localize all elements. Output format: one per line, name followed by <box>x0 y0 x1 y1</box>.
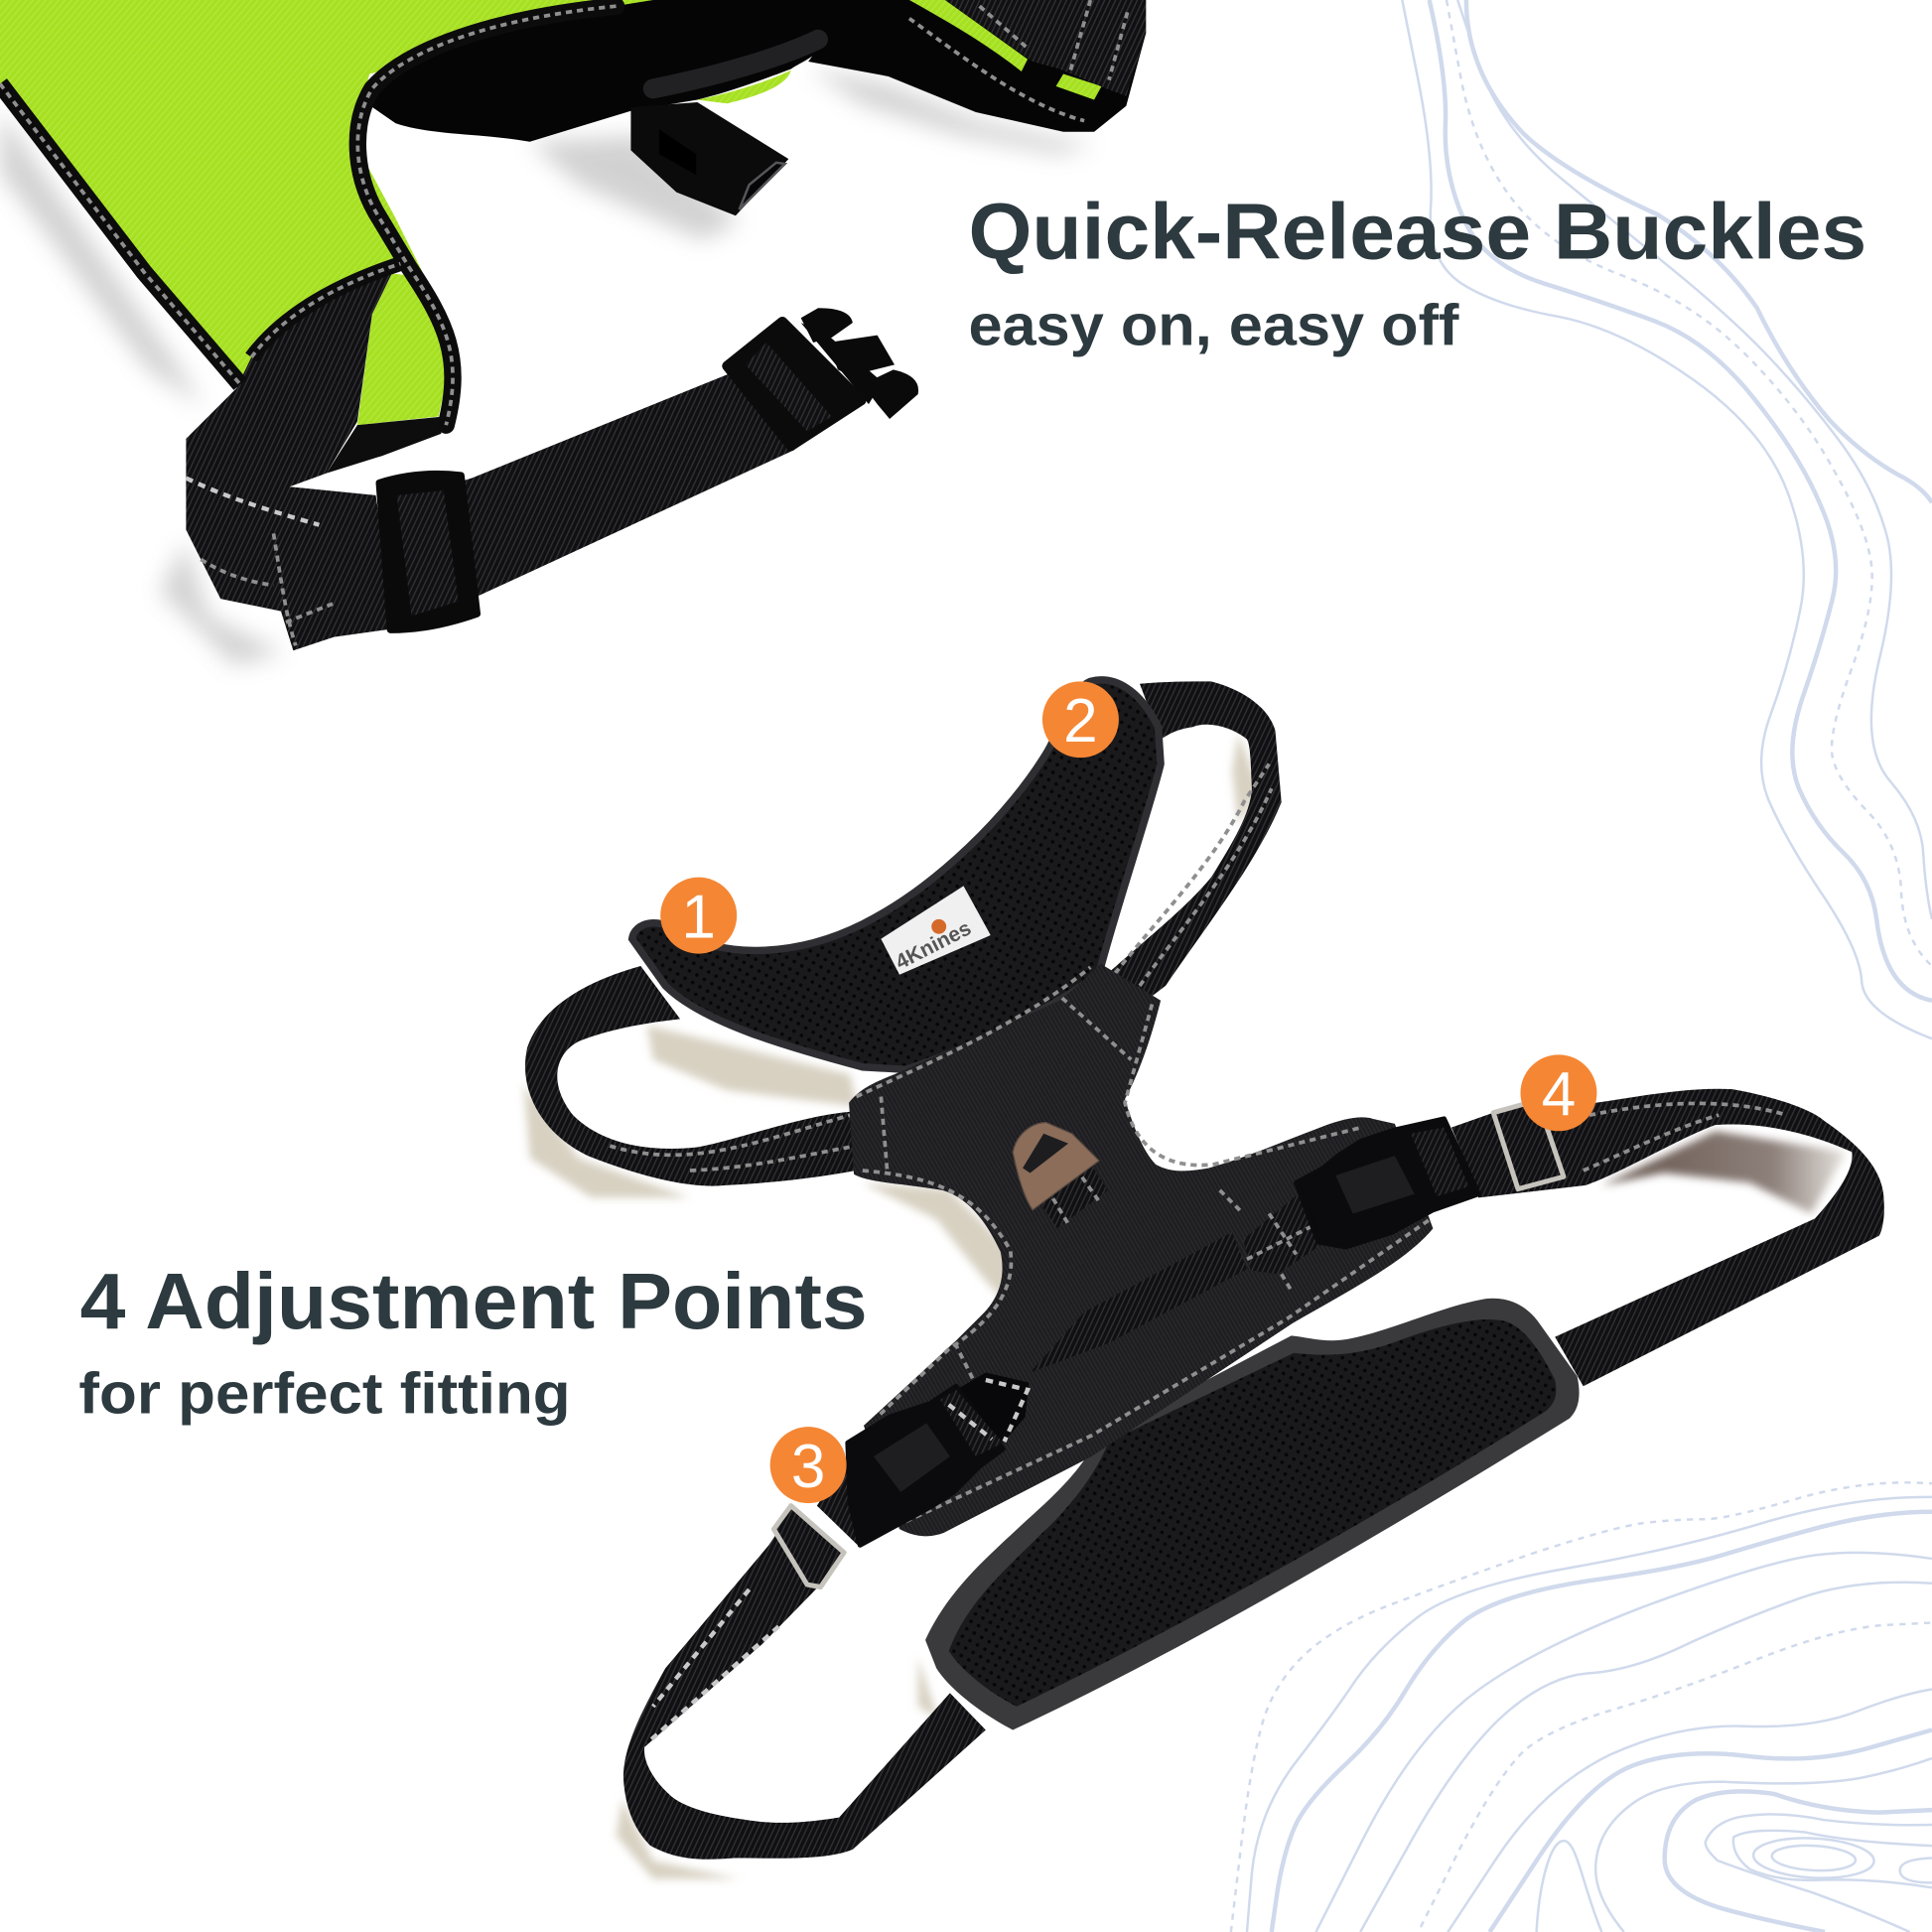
green top right patch <box>1056 73 1102 100</box>
marker 3 <box>770 1427 847 1503</box>
strap between buckle 3 and ring <box>817 1458 884 1545</box>
wing rib highlight <box>653 40 818 88</box>
trim with reflective stitching: right edge <box>357 6 617 425</box>
cast shadows <box>523 733 1846 1879</box>
label brand text: 4Knines <box>893 916 975 974</box>
slide buckle <box>379 475 477 629</box>
marker 2: 2 <box>1063 687 1098 756</box>
marker 1: 1 <box>681 883 716 951</box>
heading: 4 Adjustment Points: 4 Adjustment Points <box>80 1257 868 1345</box>
folded webbing strap <box>186 274 395 650</box>
female buckle end <box>630 102 788 215</box>
photo: black harness <box>523 680 1884 1879</box>
body stitching <box>857 967 1430 1522</box>
central body <box>849 964 1433 1536</box>
green sliver behind lining <box>697 70 791 103</box>
stitches on lower strap <box>186 479 333 645</box>
buckle 4 <box>1297 1119 1478 1247</box>
male buckle prongs <box>801 308 918 419</box>
buckle 3 <box>848 1386 1003 1545</box>
metal slide ring 3 <box>773 1506 844 1587</box>
D-ring with loop <box>1013 1123 1108 1228</box>
trim: lower panel edge <box>251 264 400 357</box>
marker 4: 4 <box>1542 1060 1576 1129</box>
strap: right side loop <box>1453 1089 1884 1386</box>
bottom fold of panel <box>327 416 444 474</box>
marker 2 <box>1042 681 1119 758</box>
decorative contour lines: bottom right <box>1231 1482 1932 1932</box>
heading: Quick-Release Buckles: Quick-Release Buckles <box>968 188 1866 276</box>
male buckle body <box>727 322 862 446</box>
subheading: for perfect fitting: for perfect fitting <box>78 1362 571 1427</box>
big mesh chest pad inner <box>949 1319 1556 1707</box>
strap: top right loop <box>1092 681 1282 1014</box>
small strap by buckle 4 <box>1243 1186 1334 1274</box>
strap reflective stitching <box>610 763 1787 1743</box>
trim: left edge <box>0 83 240 384</box>
neck pad <box>632 680 1161 1069</box>
decorative contour lines: top right <box>1402 0 1932 1038</box>
strap between buckle 4 and ring <box>1451 1113 1518 1192</box>
main strap band <box>425 369 794 617</box>
photo: lime green harness with buckle <box>0 0 1146 665</box>
soft shadows under the green harness <box>0 68 1094 665</box>
black inner lining and lower trim <box>359 0 1146 142</box>
harness label <box>881 886 991 975</box>
male buckle stem <box>801 323 883 404</box>
small strap by buckle 3 <box>956 1373 1029 1443</box>
green fabric panel <box>0 0 653 384</box>
marker 3: 3 <box>791 1433 825 1501</box>
strap: left loop <box>525 966 863 1186</box>
top right strap <box>945 0 1146 96</box>
metal slide ring 4 <box>1493 1100 1564 1189</box>
lower trim stitching <box>909 19 1084 121</box>
green top right strip <box>909 0 1028 71</box>
big mesh chest pad outer trim <box>925 1299 1580 1729</box>
green lower triangle <box>357 274 449 425</box>
marker 4 <box>1520 1054 1596 1131</box>
diagonal strap on body <box>1031 1232 1247 1373</box>
label logo dog <box>931 919 946 934</box>
strap: lower left loop <box>623 1516 986 1860</box>
marker 1 <box>660 878 737 954</box>
subheading: easy on, easy off: easy on, easy off <box>968 293 1459 357</box>
